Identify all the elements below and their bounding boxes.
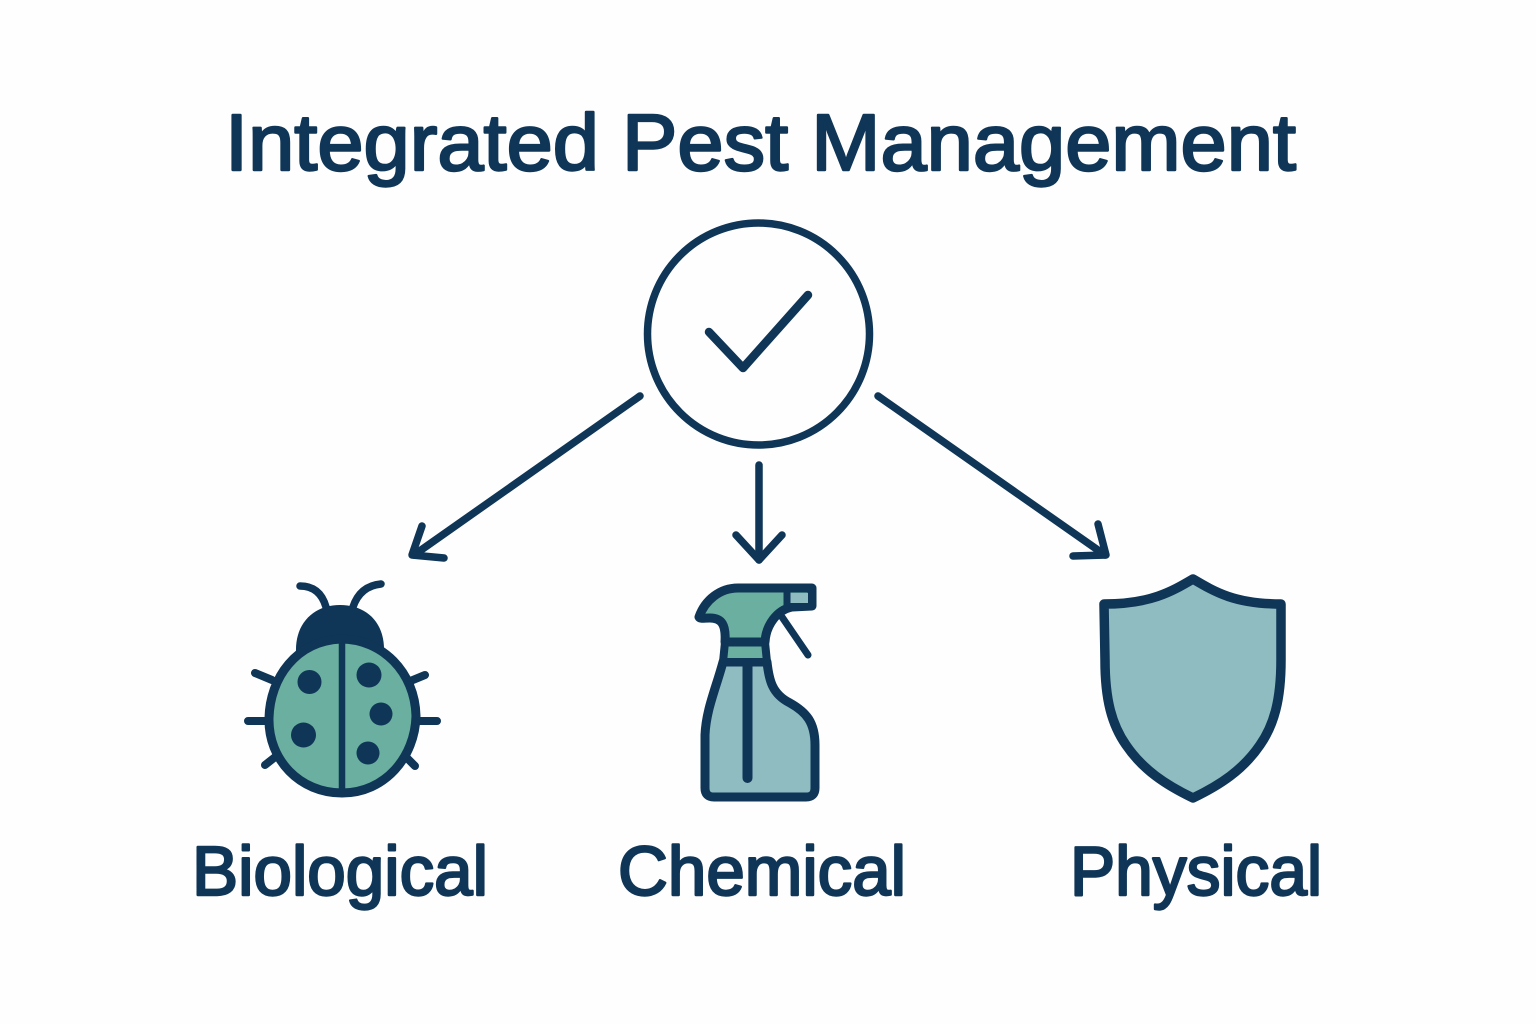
- icon: spray bottle: [699, 588, 815, 797]
- icon: check mark in circle: [648, 223, 870, 445]
- icon: ladybug: [248, 584, 437, 793]
- title: Integrated Pest Management: [225, 98, 1296, 187]
- arrow: to physical: [878, 396, 1106, 556]
- arrow: to chemical: [736, 465, 782, 560]
- label: chemical: Chemical: [618, 832, 906, 910]
- label: physical: Physical: [1070, 832, 1322, 910]
- label: biological: Biological: [192, 832, 488, 910]
- arrow: to biological: [412, 396, 640, 558]
- icon: shield: [1104, 579, 1281, 798]
